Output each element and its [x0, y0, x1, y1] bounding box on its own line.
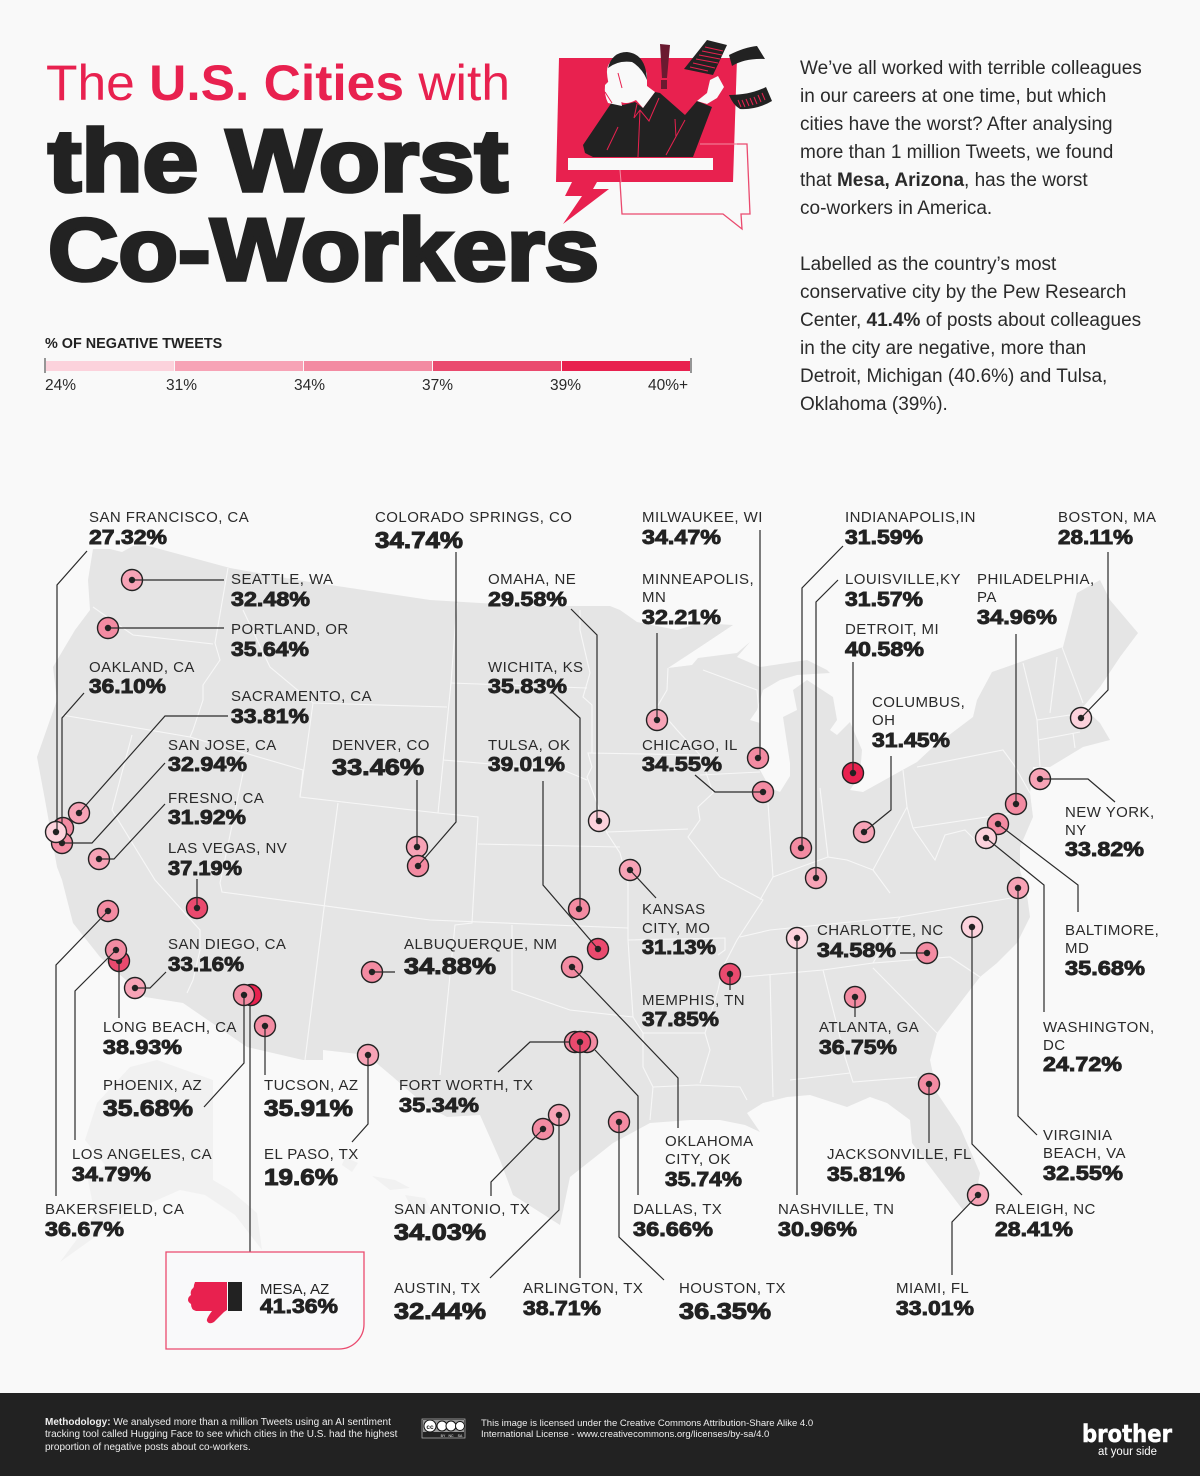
city: Columbus: OH: [872, 712, 895, 729]
city: Philadelphia: PA: [977, 589, 997, 606]
city: San Francisco: [46, 509, 249, 842]
legend: % of negative tweets: [45, 336, 691, 394]
city: San Antonio: [394, 1118, 554, 1245]
city: Bakersfield: BAKERSFIELD, CA: [45, 1201, 184, 1218]
city: Fort Worth: FORT WORTH, TX: [399, 1077, 533, 1094]
city: San Antonio: SAN ANTONIO, TX: [394, 1201, 530, 1218]
city: Sacramento: SACRAMENTO, CA: [231, 688, 372, 705]
intro text: Center, 41.4% of posts about colleagues: [800, 310, 1141, 331]
city: San Jose: SAN JOSE, CA: [168, 737, 277, 754]
city: Phoenix: [103, 984, 254, 1121]
city: Long Beach: [103, 950, 237, 1059]
city: Louisville: 31.57%: [845, 588, 923, 611]
city: Indianapolis: INDIANAPOLIS,IN: [845, 509, 976, 526]
callout: Mesa, AZ: 41.36%: [260, 1295, 338, 1318]
city: Phoenix: PHOENIX, AZ: [103, 1077, 202, 1094]
city: Baltimore: MD: [1065, 940, 1089, 957]
city: New York: 33.82%: [1065, 838, 1144, 861]
city: Albuquerque: 34.88%: [404, 953, 496, 979]
city: Albuquerque: ALBUQUERQUE, NM: [404, 936, 557, 953]
city: Los Angeles: 34.79%: [72, 1163, 151, 1186]
title: the Worst: [48, 111, 508, 210]
city: Minneapolis: MINNEAPOLIS,: [642, 571, 754, 588]
footer: [0, 1393, 1200, 1476]
city: Kansas City: [620, 860, 716, 959]
legend: % of negative tweets: 31%: [166, 377, 197, 394]
city: Kansas City: CITY, MO: [642, 920, 710, 937]
city: El Paso: [264, 1044, 378, 1190]
intro text: Detroit, Michigan (40.6%) and Tulsa,: [800, 366, 1107, 387]
city: Washington DC: 24.72%: [1043, 1053, 1122, 1076]
logo: brother at your side: brother: [1082, 1420, 1172, 1448]
city: Dallas: 36.66%: [633, 1218, 713, 1241]
city: Fresno: FRESNO, CA: [168, 790, 264, 807]
city: Fort Worth: 35.34%: [399, 1094, 479, 1117]
city: Nashville: 30.96%: [778, 1218, 857, 1241]
license text: [481, 1418, 813, 1440]
city: Indianapolis: 31.59%: [845, 526, 923, 549]
city: Charlotte: CHARLOTTE, NC: [817, 922, 944, 939]
city: Boston: 28.11%: [1058, 526, 1133, 549]
city: Tucson: [254, 1016, 359, 1121]
intro text: conservative city by the Pew Research: [800, 282, 1126, 303]
city: Miami: MIAMI, FL: [896, 1280, 969, 1297]
city: Austin: AUSTIN, TX: [394, 1280, 481, 1297]
title: [46, 55, 599, 299]
city: Wichita: [488, 659, 590, 920]
icon: creative commons badge: SA: [458, 1434, 463, 1438]
icon: creative commons badge: BY: [441, 1434, 446, 1438]
city: Tucson: 35.91%: [264, 1095, 353, 1121]
city: Portland: 35.64%: [231, 638, 309, 661]
intro text: We’ve all worked with terrible colleagues: [800, 58, 1142, 79]
city: New York: NY: [1065, 822, 1087, 839]
city: Detroit: 40.58%: [845, 638, 924, 661]
city: Austin: 32.44%: [394, 1298, 486, 1324]
city: San Francisco: 27.32%: [89, 526, 167, 549]
icon: thumbs down: [188, 1282, 242, 1323]
city: Arlington: ARLINGTON, TX: [523, 1280, 643, 1297]
city: Oklahoma City: [562, 956, 754, 1191]
legend: % of negative tweets: 37%: [422, 377, 453, 394]
city: Omaha: [488, 571, 610, 832]
city: Memphis: MEMPHIS, TN: [642, 992, 745, 1009]
city: Fort Worth: [399, 1032, 586, 1117]
city: Kansas City: KANSAS: [642, 901, 706, 918]
city: Omaha: OMAHA, NE: [488, 571, 576, 588]
city: Omaha: 29.58%: [488, 588, 567, 611]
city: Seattle: [122, 570, 333, 611]
city: Louisville: LOUISVILLE,KY: [845, 571, 961, 588]
city: Philadelphia: 34.96%: [977, 606, 1057, 629]
city: Washington DC: [976, 828, 1155, 1076]
intro text: Labelled as the country’s most: [800, 254, 1057, 275]
city: Fresno: 31.92%: [168, 806, 246, 829]
intro text: more than 1 million Tweets, we found: [800, 142, 1113, 163]
callout: Mesa, AZ: MESA, AZ: [260, 1281, 329, 1298]
methodology: tracking tool called Hugging Face to see which cities in the U.S. had the highest: [45, 1429, 398, 1440]
methodology: [45, 1417, 398, 1453]
city: Oklahoma City: OKLAHOMA: [665, 1133, 754, 1150]
city: Seattle: SEATTLE, WA: [231, 571, 333, 588]
city: Chicago: 34.55%: [642, 753, 722, 776]
city: Tucson: TUCSON, AZ: [264, 1077, 359, 1094]
city: Houston: 36.35%: [679, 1298, 771, 1324]
legend: % of negative tweets: 39%: [550, 377, 581, 394]
city: Virginia Beach: [1008, 878, 1126, 1185]
city: Bakersfield: 36.67%: [45, 1218, 124, 1241]
city: Jacksonville: [827, 1074, 972, 1186]
city: Oklahoma City: 35.74%: [665, 1168, 742, 1191]
license text: International License - www.creativecommons.org/licenses/by-sa/4.0: [481, 1429, 769, 1440]
city: Miami: [896, 1184, 988, 1320]
icon: creative commons badge: NC: [448, 1434, 454, 1438]
city: Houston: [608, 1112, 786, 1324]
city: Portland: [98, 618, 349, 661]
legend: % of negative tweets: % OF NEGATIVE TWEETS: [45, 336, 223, 352]
city: New York: NEW YORK,: [1065, 804, 1155, 821]
title: The U.S. Cities with: [46, 55, 510, 111]
city: Oakland: 36.10%: [89, 675, 166, 698]
legend: % of negative tweets: 40%+: [648, 377, 688, 394]
city: Jacksonville: JACKSONVILLE, FL: [827, 1146, 972, 1163]
city: Philadelphia: PHILADELPHIA,: [977, 571, 1095, 588]
legend: % of negative tweets: 34%: [294, 377, 325, 394]
logo: brother at your side: at your side: [1098, 1446, 1157, 1458]
city: San Antonio: 34.03%: [394, 1219, 486, 1245]
city: Colorado Springs: COLORADO SPRINGS, CO: [375, 509, 572, 526]
city: Indianapolis: [790, 509, 976, 858]
city: Atlanta: ATLANTA, GA: [819, 1019, 919, 1036]
city: Tulsa: TULSA, OK: [488, 737, 570, 754]
city: Detroit: DETROIT, MI: [845, 621, 939, 638]
city: Milwaukee: MILWAUKEE, WI: [642, 509, 763, 526]
city: Atlanta: [819, 986, 919, 1059]
icon: creative commons badge: [422, 1419, 465, 1438]
city: Long Beach: LONG BEACH, CA: [103, 1019, 237, 1036]
city: El Paso: 19.6%: [264, 1164, 338, 1190]
intro text: in the city are negative, more than: [800, 338, 1086, 359]
city: Jacksonville: 35.81%: [827, 1163, 905, 1186]
city: Dallas: DALLAS, TX: [633, 1201, 722, 1218]
city: Wichita: 35.83%: [488, 675, 567, 698]
intro text: in our careers at one time, but which: [800, 86, 1106, 107]
intro text: co-workers in America.: [800, 198, 992, 219]
marker: Mesa: [240, 984, 262, 1252]
intro text: cities have the worst? After analysing: [800, 114, 1113, 135]
city: Minneapolis: MN: [642, 589, 666, 606]
city: Chicago: CHICAGO, IL: [642, 737, 738, 754]
city: Seattle: 32.48%: [231, 588, 310, 611]
city: Raleigh: 28.41%: [995, 1218, 1073, 1241]
city: Virginia Beach: VIRGINIA: [1043, 1127, 1112, 1144]
methodology: Methodology: We analysed more than a million Tweets using an AI sentiment: [45, 1417, 391, 1428]
city: Charlotte: 34.58%: [817, 939, 896, 962]
city: Los Angeles: [72, 940, 212, 1186]
title: Co-Workers: [48, 200, 599, 299]
city: Arlington: [523, 1032, 643, 1320]
city: Nashville: [778, 928, 894, 1241]
map: Alaska and Hawaii silhouettes: [60, 1060, 432, 1262]
city: Oakland: OAKLAND, CA: [89, 659, 195, 676]
city: San Jose: [52, 737, 277, 854]
city: Las Vegas: [168, 840, 287, 918]
city: Long Beach: 38.93%: [103, 1036, 182, 1059]
city: Nashville: NASHVILLE, TN: [778, 1201, 894, 1218]
city: Raleigh: RALEIGH, NC: [995, 1201, 1096, 1218]
city: Las Vegas: 37.19%: [168, 857, 242, 880]
city: Portland: PORTLAND, OR: [231, 621, 349, 638]
city: Fresno: [88, 790, 264, 870]
logo: brother at your side: [1082, 1420, 1172, 1458]
city: Bakersfield: [45, 900, 184, 1241]
map: contiguous United States: [37, 545, 1138, 1225]
city: Minneapolis: [642, 571, 754, 730]
city: Baltimore: BALTIMORE,: [1065, 922, 1159, 939]
city: Houston: HOUSTON, TX: [679, 1280, 786, 1297]
icon: creative commons badge: cc: [426, 1424, 434, 1431]
city: Tulsa: 39.01%: [488, 753, 565, 776]
city: Sacramento: [68, 688, 372, 824]
city: Denver: 33.46%: [332, 754, 424, 780]
city: Albuquerque: [362, 936, 557, 982]
map panel: [37, 509, 1159, 1324]
city: Baltimore: [988, 814, 1159, 980]
city: Dallas: [576, 1032, 722, 1241]
city: Denver: DENVER, CO: [332, 737, 430, 754]
city: Chicago: [642, 737, 774, 802]
city: Atlanta: 36.75%: [819, 1036, 897, 1059]
city: Philadelphia: [977, 571, 1095, 814]
callout: Mesa, AZ: [166, 1252, 364, 1349]
city: San Diego: 33.16%: [168, 953, 244, 976]
city: San Francisco: SAN FRANCISCO, CA: [89, 509, 249, 526]
intro text: Oklahoma (39%).: [800, 394, 948, 415]
city: San Jose: 32.94%: [168, 753, 247, 776]
city: Raleigh: [962, 916, 1096, 1241]
illustration: frustrated worker in speech bubble: [556, 40, 772, 229]
city: Charlotte: [817, 922, 944, 964]
city: Columbus: [854, 694, 965, 842]
city: Wichita: WICHITA, KS: [488, 659, 584, 676]
city: New York: [1030, 768, 1155, 861]
city: Memphis: 37.85%: [642, 1008, 719, 1031]
intro text: [800, 58, 1142, 415]
city: Miami: 33.01%: [896, 1297, 974, 1320]
city: Denver: [332, 737, 430, 858]
city: Colorado Springs: [375, 509, 572, 876]
city: Sacramento: 33.81%: [231, 705, 309, 728]
city: Colorado Springs: 34.74%: [375, 527, 463, 553]
methodology: proportion of negative posts about co-workers.: [45, 1442, 251, 1453]
city: Virginia Beach: BEACH, VA: [1043, 1145, 1126, 1162]
city: Boston: BOSTON, MA: [1058, 509, 1156, 526]
city: San Diego: SAN DIEGO, CA: [168, 936, 286, 953]
city: Phoenix: 35.68%: [103, 1095, 193, 1121]
city: Las Vegas: LAS VEGAS, NV: [168, 840, 287, 857]
city: Los Angeles: LOS ANGELES, CA: [72, 1146, 212, 1163]
city: Baltimore: 35.68%: [1065, 957, 1145, 980]
city: Columbus: COLUMBUS,: [872, 694, 965, 711]
city: Kansas City: 31.13%: [642, 936, 716, 959]
city: Arlington: 38.71%: [523, 1297, 601, 1320]
city: Oklahoma City: CITY, OK: [665, 1151, 731, 1168]
city: San Diego: [124, 936, 286, 998]
city: El Paso: EL PASO, TX: [264, 1146, 359, 1163]
city: Milwaukee: 34.47%: [642, 526, 721, 549]
city: Milwaukee: [642, 509, 768, 768]
city: Minneapolis: 32.21%: [642, 606, 721, 629]
city: Oakland: [52, 659, 195, 838]
city: Austin: [394, 1104, 570, 1324]
city: Washington DC: WASHINGTON,: [1043, 1019, 1155, 1036]
legend: % of negative tweets: 24%: [45, 377, 76, 394]
intro text: that Mesa, Arizona, has the worst: [800, 170, 1088, 191]
city: Detroit: [842, 621, 939, 784]
city: Tulsa: [488, 737, 608, 960]
city: Louisville: [806, 571, 961, 888]
city: Columbus: 31.45%: [872, 729, 950, 752]
city: Memphis: [642, 964, 745, 1031]
city: Virginia Beach: 32.55%: [1043, 1162, 1123, 1185]
city: Washington DC: DC: [1043, 1037, 1066, 1054]
license text: This image is licensed under the Creative Commons Attribution-Share Alike 4.0: [481, 1418, 813, 1429]
city: Boston: [1058, 509, 1156, 728]
